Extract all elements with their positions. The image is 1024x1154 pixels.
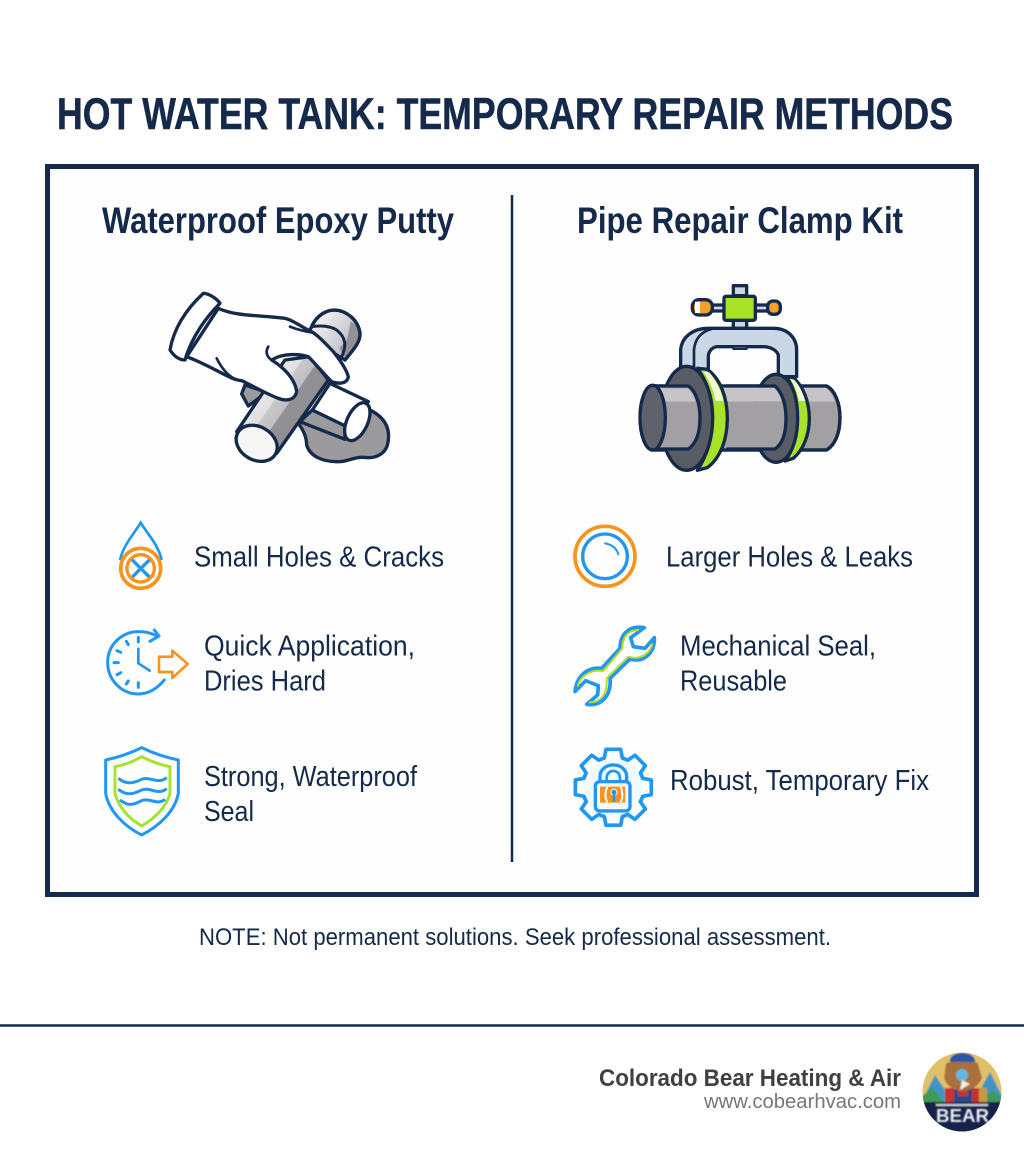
icon: hand applying putty stick bbox=[170, 293, 389, 469]
logo bbox=[922, 1052, 1002, 1132]
center divider bbox=[511, 195, 513, 862]
label: Quick Application, bbox=[204, 630, 415, 662]
note: NOTE: Not permanent solutions. Seek professional assessment. bbox=[199, 924, 831, 951]
label: Mechanical Seal, bbox=[680, 630, 876, 662]
icon: water drop with x bbox=[120, 523, 162, 588]
label bbox=[204, 761, 418, 828]
panel: waterproof epoxy putty bbox=[102, 200, 454, 835]
item: strong waterproof seal bbox=[106, 748, 418, 835]
label: Seal bbox=[204, 796, 254, 828]
panel: pipe repair clamp kit bbox=[575, 200, 929, 825]
heading: epoxy putty: Waterproof Epoxy Putty bbox=[102, 200, 454, 241]
label: Robust, Temporary Fix bbox=[670, 765, 929, 797]
item: quick application bbox=[108, 630, 415, 698]
footer brand bbox=[600, 1052, 1002, 1132]
label: Reusable bbox=[680, 666, 787, 698]
item: robust temporary fix bbox=[575, 749, 929, 825]
heading: clamp kit: Pipe Repair Clamp Kit bbox=[577, 200, 903, 241]
logo wordmark: BEAR bbox=[936, 1105, 989, 1126]
icon: pipe with clamp bbox=[640, 286, 840, 470]
label: Small Holes & Cracks bbox=[194, 542, 444, 574]
website: www.cobearhvac.com bbox=[703, 1091, 901, 1113]
item: larger holes and leaks bbox=[575, 526, 913, 586]
icon: clock with arrow bbox=[108, 630, 188, 694]
label: Strong, Waterproof bbox=[204, 761, 418, 793]
icon: gear with padlock bbox=[575, 749, 651, 825]
icon: ring hole bbox=[575, 526, 635, 586]
item: small holes and cracks bbox=[120, 523, 444, 588]
label bbox=[204, 630, 415, 698]
label: Larger Holes & Leaks bbox=[666, 542, 913, 574]
label bbox=[680, 630, 876, 698]
footer rule bbox=[0, 1024, 1024, 1027]
panel: comparison frame bbox=[48, 166, 976, 894]
label: Dries Hard bbox=[204, 666, 326, 698]
icon: wrench bbox=[575, 627, 654, 705]
company name: Colorado Bear Heating & Air bbox=[599, 1065, 901, 1092]
icon: shield with waves bbox=[106, 748, 178, 835]
item: mechanical seal bbox=[575, 627, 876, 705]
